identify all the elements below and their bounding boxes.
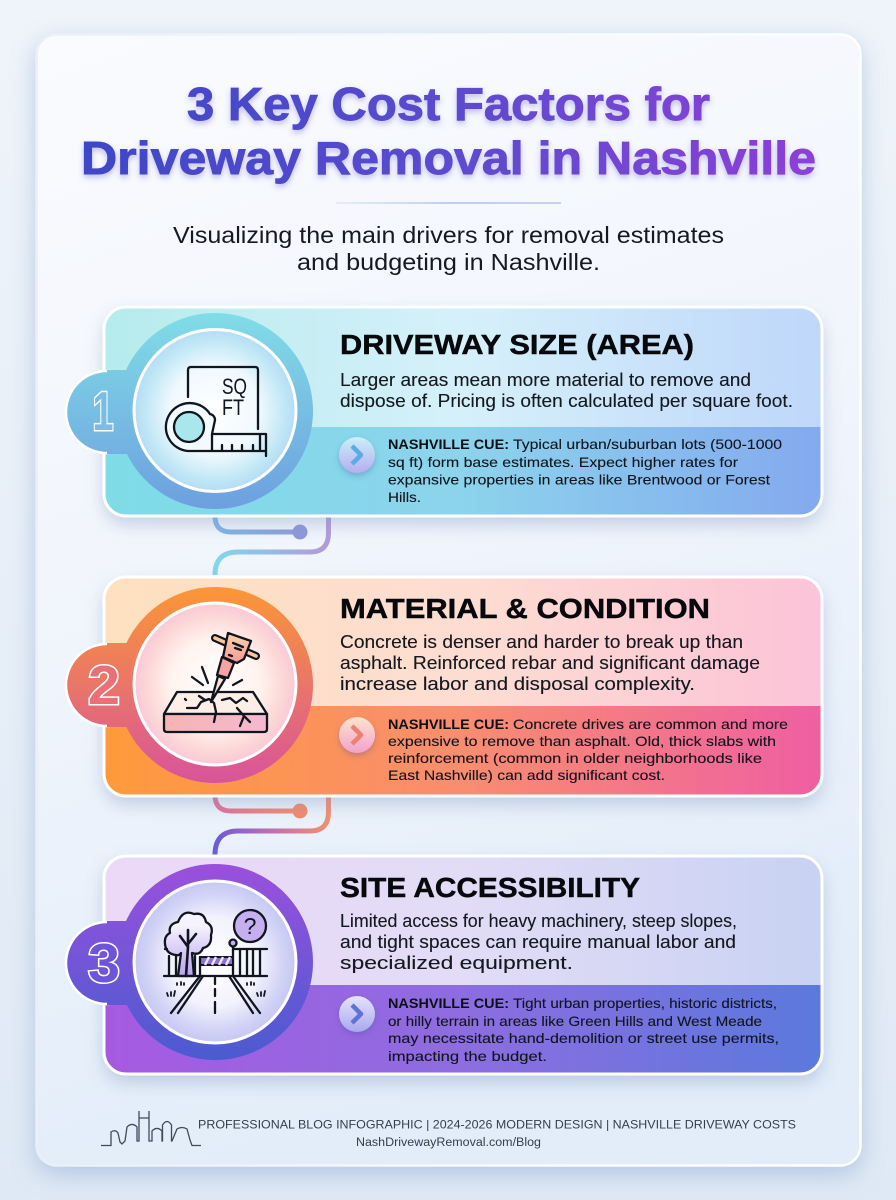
nashville cue text: Typical urban/suburban lots (500-1000 [513,436,782,452]
footer text: NashDrivewayRemoval.com/Blog [356,1137,541,1149]
body text: increase labor and disposal complexity. [340,674,695,694]
icon: tree, gate, fence and road: ? [244,913,256,939]
body text: specialized equipment. [340,953,573,973]
subtitle: Visualizing the main drivers for removal estimates [173,222,724,248]
heading: SITE ACCESSIBILITY [340,872,640,903]
nashville cue text: reinforcement (common in older neighborhoods like [388,750,762,766]
icon: tape measure and sq ft sheet [134,330,296,492]
number badge 3 [66,864,313,1060]
nashville cue text: impacting the budget. [388,1048,547,1064]
body text: Limited access for heavy machinery, steep slopes, [340,911,737,931]
body text: Concrete is denser and harder to break up than [340,632,743,652]
icon: tape measure and sq ft sheet: FT [222,395,244,420]
nashville cue text [388,995,779,1064]
body text [340,911,737,973]
nashville cue text: may necessitate hand-demolition or street use permits, [388,1030,779,1046]
nashville cue text: East Nashville) can add significant cost. [388,767,665,783]
nashville cue text: expansive properties in areas like Brentwood or Forest [388,472,770,488]
icon: arrow bullet [339,996,375,1032]
footer text [198,1118,796,1149]
nashville cue text: Tight urban properties, historic districts, [513,995,777,1011]
heading: MATERIAL & CONDITION [340,593,710,624]
nashville cue text: sq ft) form base estimates. Expect higher rates for [388,454,738,470]
nashville cue text: expensive to remove than asphalt. Old, thick slabs with [388,733,776,749]
panel: material and condition [66,577,822,796]
nashville cue text: NASHVILLE CUE: [388,716,509,732]
nashville cue text [388,436,782,505]
title [81,78,816,184]
icon: jackhammer on cracked slab [134,603,296,765]
nashville cue text [388,716,788,783]
body text: asphalt. Reinforced rebar and significant damage [340,653,760,673]
icon: arrow bullet [339,437,375,473]
number badge 1 [66,313,313,509]
number badge 2 [66,587,313,783]
icon: arrow bullet [339,717,375,753]
icon: tree, gate, fence and road [134,881,296,1043]
body text: Larger areas mean more material to remove and [340,370,751,390]
nashville cue text: NASHVILLE CUE: [388,436,509,452]
footer text: PROFESSIONAL BLOG INFOGRAPHIC | 2024-2026 MODERN DESIGN | NASHVILLE DRIVEWAY COSTS [198,1118,796,1132]
body text [340,632,760,694]
panel: site accessibility [66,856,822,1074]
subtitle [173,222,724,275]
nashville cue text: Concrete drives are common and more [513,716,788,732]
number badge 1: 1 [92,380,114,442]
title: 3 Key Cost Factors for [187,78,710,130]
body text: and tight spaces can require manual labor and [340,932,736,952]
body text: dispose of. Pricing is often calculated per square foot. [340,391,793,411]
connector: card 1 to card 2 [215,506,328,575]
heading: DRIVEWAY SIZE (AREA) [340,329,694,360]
panel: driveway size [66,307,822,516]
subtitle: and budgeting in Nashville. [297,249,600,275]
title: Driveway Removal in Nashville [81,132,816,184]
number badge 2: 2 [88,654,120,716]
nashville cue text: or hilly terrain in areas like Green Hills and West Meade [388,1013,762,1029]
body text [340,370,793,411]
nashville cue text: Hills. [388,489,421,505]
connector: card 2 to card 3 [215,786,328,855]
footer skyline icon [101,1111,201,1146]
nashville cue text: NASHVILLE CUE: [388,995,509,1011]
number badge 3: 3 [88,932,120,994]
icon: tape measure and sq ft sheet: SQ [222,374,247,399]
